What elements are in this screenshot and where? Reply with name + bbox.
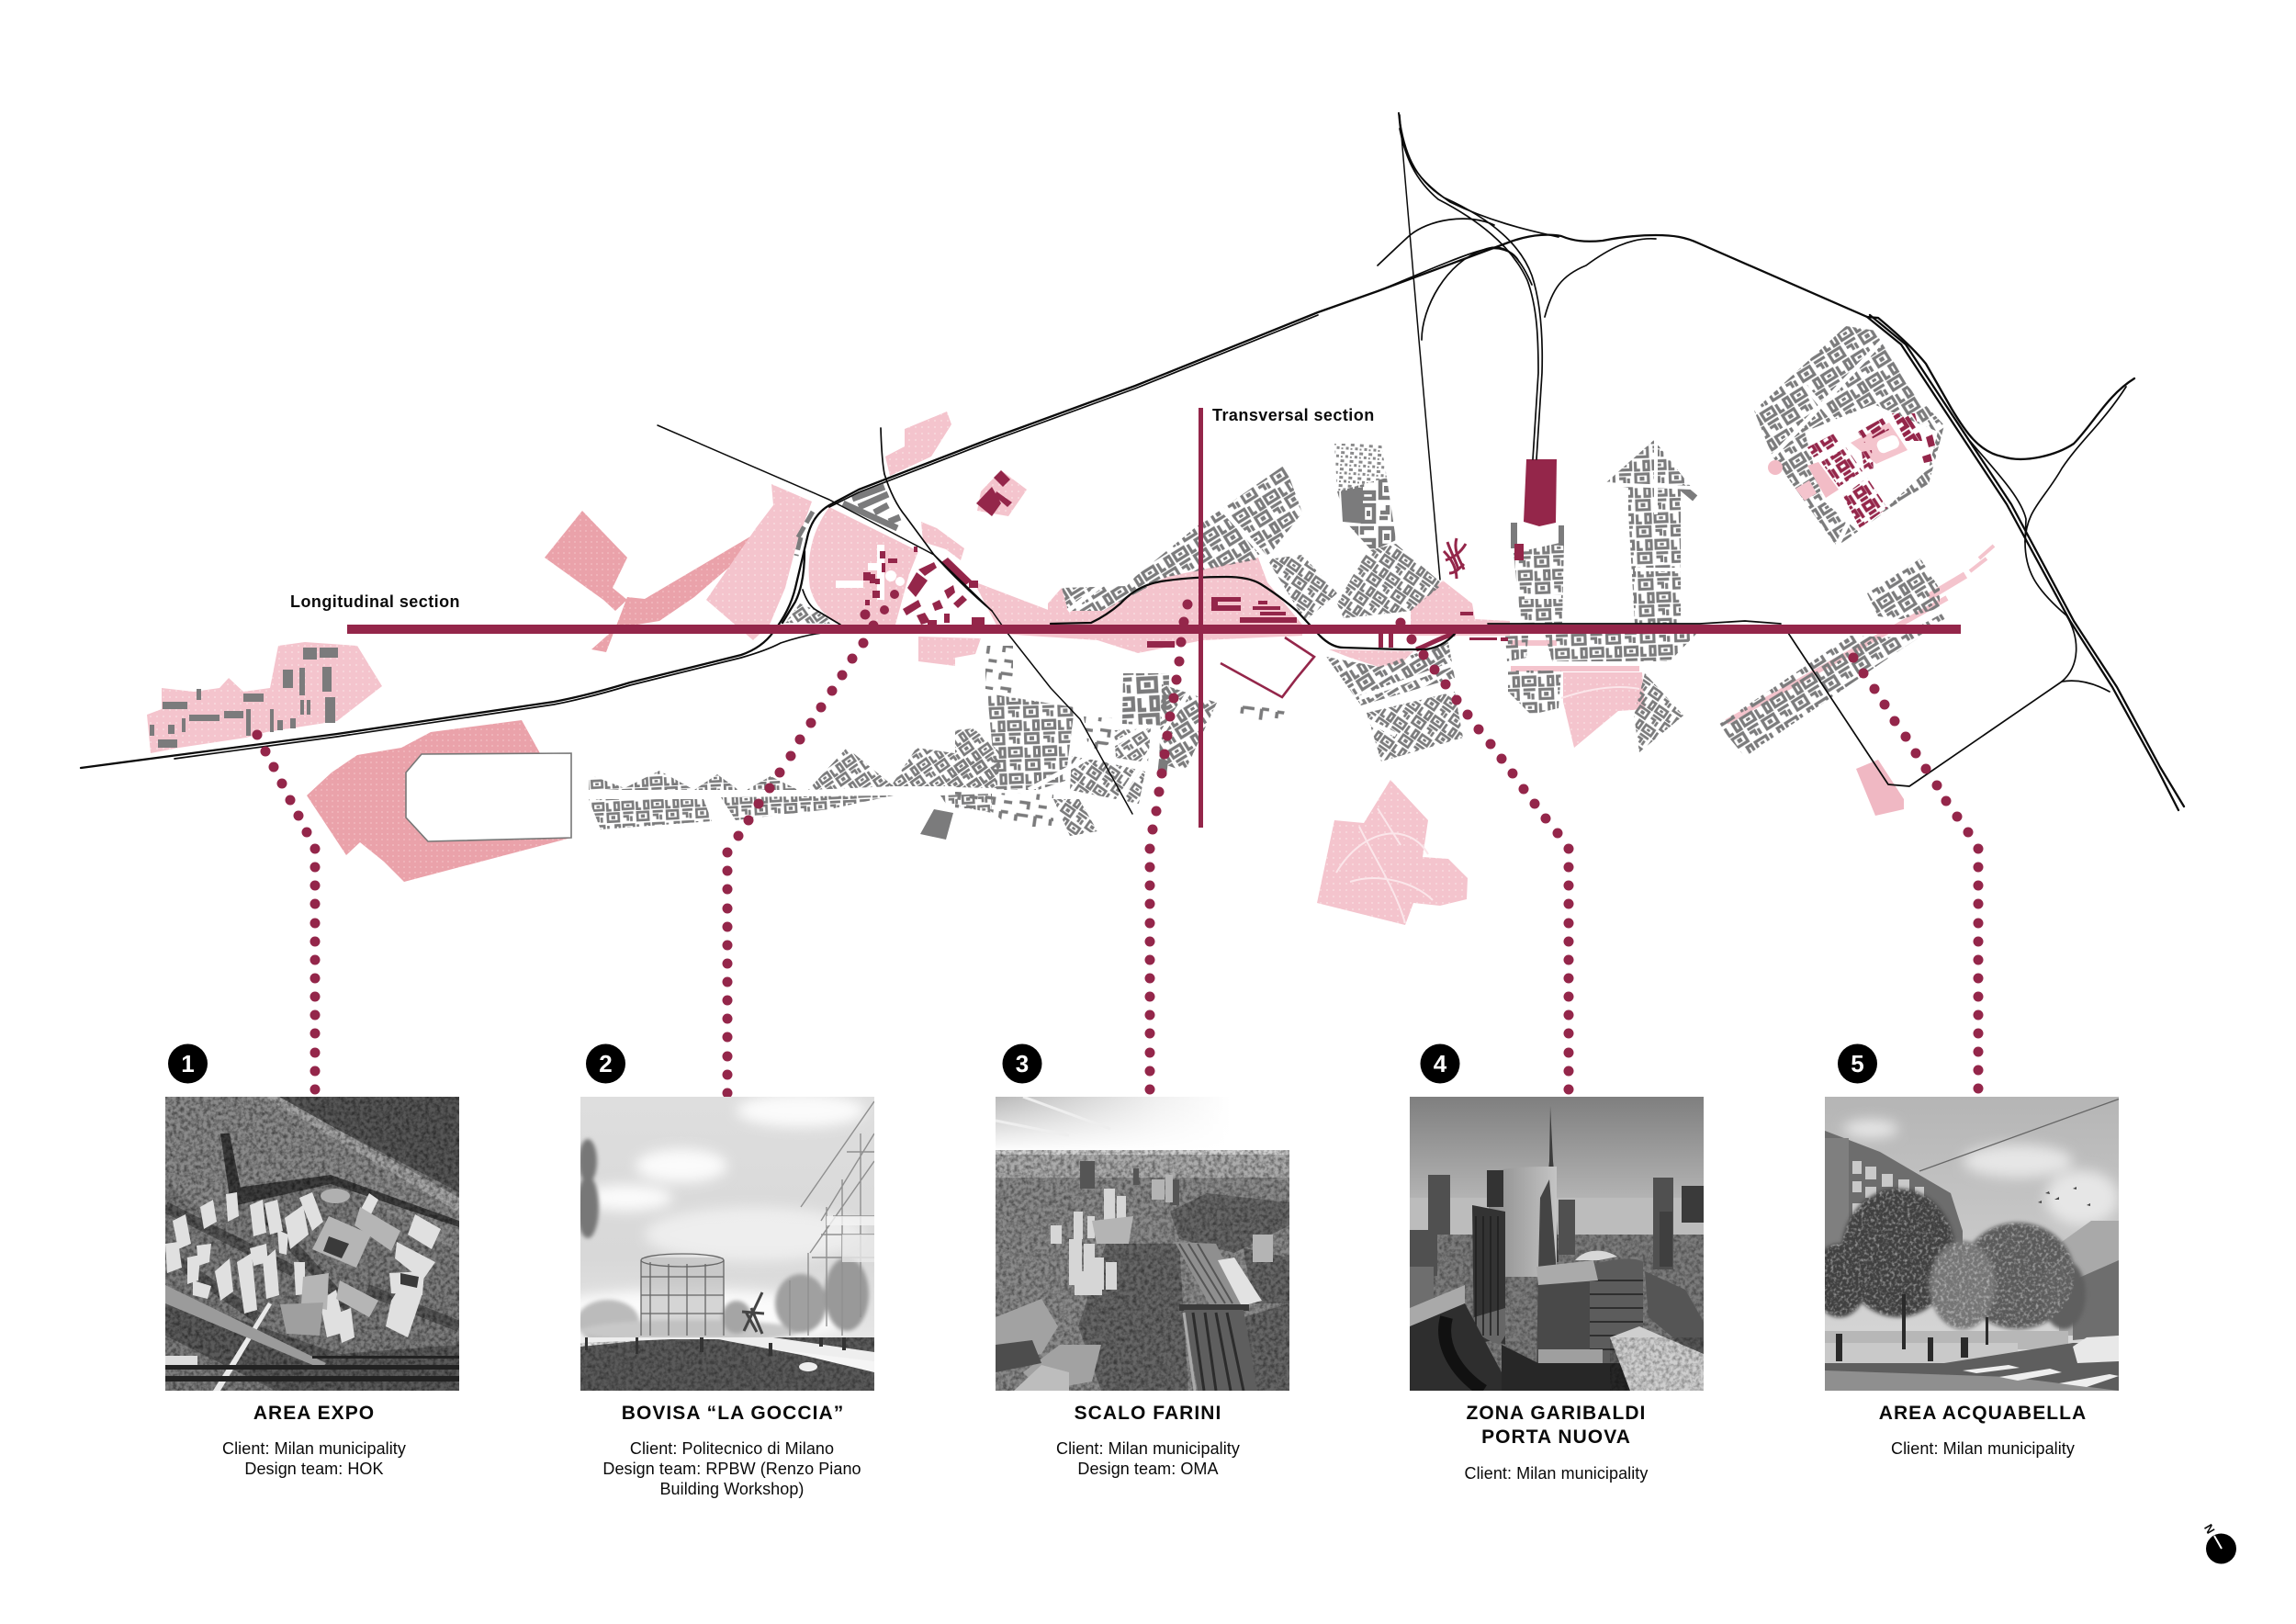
dotted leader: Scalo Farini — [1144, 599, 1192, 1095]
icon: north arrow: N — [2201, 1522, 2218, 1536]
upper red cluster — [976, 470, 1012, 516]
dotted leader: Garibaldi — [1396, 617, 1574, 1095]
label: transversal section: Transversal section — [1212, 406, 1375, 424]
icon: north arrow — [2201, 1522, 2236, 1563]
project title: PORTA NUOVA — [1481, 1427, 1631, 1448]
central station — [1524, 459, 1557, 526]
photo: Porta Nuova towers — [1410, 1097, 1704, 1391]
panel: project 1 Area Expo — [165, 1043, 459, 1478]
dotted leader: Acquabella — [1848, 652, 1984, 1093]
project credits: Building Workshop) — [659, 1480, 805, 1498]
Bovisa red buildings — [863, 547, 985, 625]
dotted leader: Bovisa — [722, 610, 878, 1099]
green and transformation areas in pink — [147, 412, 1994, 925]
Porta Nuova red area — [1416, 538, 1524, 649]
longitudinal section bar — [347, 625, 1961, 634]
white paths in park — [1336, 687, 1639, 923]
north-east pink and crimson quarter — [1768, 404, 1938, 533]
railway lines — [81, 113, 2184, 814]
photo: street view with trees — [1825, 1097, 2119, 1391]
number badge 4: 4 — [1434, 1050, 1447, 1077]
number badge 1: 1 — [181, 1050, 195, 1077]
transversal section bar — [1199, 408, 1203, 828]
project credits: Design team: HOK — [244, 1460, 384, 1478]
project title: AREA EXPO — [253, 1403, 375, 1424]
panel: project 2 Bovisa La Goccia — [525, 1043, 874, 1498]
Farini red blocks — [1147, 597, 1393, 697]
project credits: Client: Milan municipality — [1891, 1439, 2075, 1458]
number badge 2: 2 — [599, 1050, 613, 1077]
white streets breaking the fabric — [1773, 331, 1929, 547]
label: longitudinal section: Longitudinal section — [290, 592, 460, 611]
panel: project 5 Area Acquabella — [1812, 1043, 2119, 1458]
project credits: Design team: RPBW (Renzo Piano — [602, 1460, 861, 1478]
dotted leader: Area Expo — [252, 729, 320, 1095]
number badge 1 — [168, 1043, 208, 1084]
number badge 2 — [586, 1043, 625, 1084]
project credits: Client: Milan municipality — [1465, 1464, 1648, 1483]
photo: aerial view of Area Expo — [165, 1097, 459, 1391]
number badge 5 — [1838, 1043, 1877, 1084]
panel: urban map — [81, 113, 2184, 925]
project credits: Design team: OMA — [1077, 1460, 1219, 1478]
south-centre sparse fabric — [955, 646, 1217, 836]
project title: BOVISA “LA GOCCIA” — [622, 1403, 844, 1424]
number badge 5: 5 — [1851, 1050, 1864, 1077]
number badge 3: 3 — [1016, 1050, 1029, 1077]
grey sheds of the Area Expo site — [150, 648, 338, 748]
city blocks in grey — [589, 326, 1945, 840]
project credits: Client: Politecnico di Milano — [630, 1439, 834, 1458]
project title: SCALO FARINI — [1075, 1403, 1221, 1424]
number badge 3 — [1003, 1043, 1041, 1084]
photo: aerial view of rail yard — [996, 1097, 1289, 1391]
built projects in crimson — [863, 459, 1557, 697]
project title: AREA ACQUABELLA — [1879, 1403, 2087, 1424]
exhibition site outline — [406, 753, 571, 841]
project credits: Client: Milan municipality — [1056, 1439, 1240, 1458]
panel: project 4 Zona Garibaldi Porta Nuova — [1410, 1043, 1704, 1483]
photo: gasometer in park — [580, 1097, 874, 1391]
panel: project 3 Scalo Farini — [996, 1043, 1289, 1478]
project title: ZONA GARIBALDI — [1467, 1403, 1646, 1424]
grey blocks around Bovisa — [785, 487, 900, 624]
number badge 4 — [1420, 1043, 1460, 1084]
project credits: Client: Milan municipality — [222, 1439, 406, 1458]
